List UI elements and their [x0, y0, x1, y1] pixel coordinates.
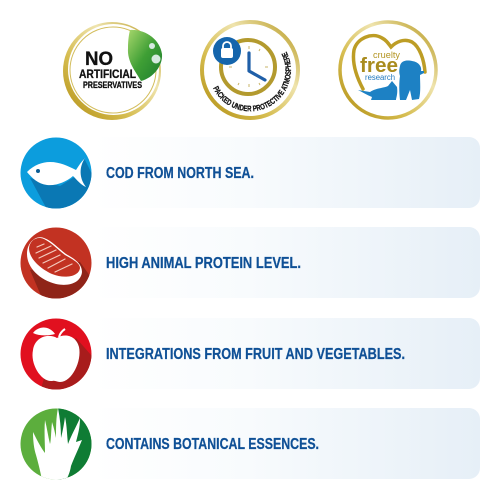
icon: clock	[221, 40, 275, 94]
text: botanical: CONTAINS BOTANICAL ESSENCES.	[106, 436, 319, 453]
curved badge text	[213, 46, 291, 111]
cruelty free text	[360, 50, 401, 82]
icon: apple	[20, 318, 92, 390]
badge: no artificial preservatives	[63, 22, 162, 120]
panel: cod row	[92, 137, 480, 208]
panel: fruit row	[92, 318, 480, 389]
badge text: NO	[85, 49, 113, 70]
panel: botanical row	[92, 408, 480, 479]
icon: padlock	[213, 37, 241, 65]
icon: dog and cat silhouettes	[358, 61, 424, 100]
badge: cruelty free research	[340, 22, 436, 118]
badge: packed under protective atmosphere	[200, 20, 300, 120]
icon: gold heart	[353, 36, 425, 89]
cruelty free text: research	[365, 73, 395, 82]
panel: protein row	[92, 227, 480, 298]
icon: leaf	[128, 30, 162, 81]
badge text: PRESERVATIVES	[83, 80, 142, 90]
icon: steak	[20, 228, 92, 298]
icon: aloe plant	[20, 408, 92, 480]
cruelty free text: free	[360, 55, 398, 77]
text: cod: COD FROM NORTH SEA.	[106, 165, 254, 182]
badge: packed under protective atmosphere: PACKED UNDER PROTECTIVE ATMOSPHERE	[213, 52, 292, 112]
text: protein: HIGH ANIMAL PROTEIN LEVEL.	[106, 255, 301, 272]
badge text: ARTIFICIAL	[79, 67, 136, 81]
text: fruit: INTEGRATIONS FROM FRUIT AND VEGETABLES.	[106, 346, 405, 363]
badge text	[79, 49, 142, 90]
cruelty free text: cruelty	[373, 50, 401, 60]
icon: fish	[20, 138, 92, 208]
